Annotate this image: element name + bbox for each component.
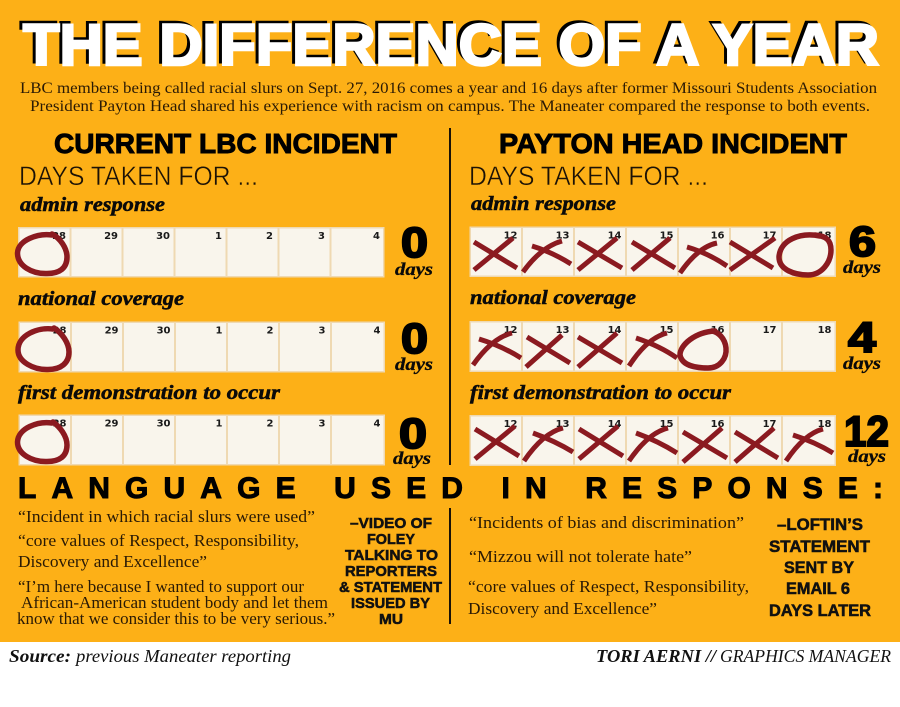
calendar: LBC admin response: 29: [104, 231, 118, 242]
calendar: Head national coverage: [470, 321, 836, 372]
quotes: LBC incident: Discovery and Excellence”: [18, 552, 207, 571]
intro text: President Payton Head shared his experience with racism on campus. The Maneater compared the response to both events.: [30, 98, 870, 115]
count: 0 days first demonstration: 0: [399, 410, 427, 458]
calendar: Head first demonstration: 14: [608, 419, 622, 430]
quotes: Payton Head incident: “core values of Respect, Responsibility,: [468, 577, 749, 596]
calendar: LBC national coverage: 3: [319, 326, 326, 336]
calendar: Head first demonstration: [470, 415, 836, 466]
intro text: [20, 80, 877, 115]
quotes: LBC incident: “core values of Respect, Responsibility,: [18, 531, 299, 550]
caption: Loftin's statement: STATEMENT: [769, 538, 870, 556]
count: 0 days admin response: [395, 219, 433, 279]
calendar: LBC national coverage: 28: [53, 326, 67, 336]
label: first demonstration left: first demonstration to occur: [18, 382, 280, 404]
count: 6 days admin response: 6: [849, 218, 876, 266]
calendar: LBC admin response: 4: [373, 231, 380, 242]
title: THE DIFFERENCE OF A YEAR: [23, 13, 879, 78]
count: 0 days national coverage: days: [395, 354, 433, 374]
label: national coverage left: national coverage: [18, 288, 184, 310]
calendar: LBC national coverage: 29: [105, 326, 119, 336]
heading: Payton Head incident: PAYTON HEAD INCIDENT: [499, 128, 847, 159]
calendar: LBC admin response: [18, 227, 384, 278]
calendar: LBC first demonstration: 3: [319, 418, 326, 430]
quotes: LBC incident: “I’m here because I wanted to support our: [18, 577, 304, 596]
caption: video of Foley: REPORTERS: [345, 563, 437, 580]
caption: video of Foley: [339, 515, 442, 628]
calendar: Head admin response: [470, 226, 836, 277]
count: 0 days national coverage: [395, 315, 433, 374]
count: 0 days first demonstration: days: [393, 448, 431, 468]
calendar: LBC admin response: 28: [52, 231, 66, 242]
quotes: LBC incident: know that we consider this to be very serious.”: [17, 609, 335, 628]
intro text: LBC members being called racial slurs on Sept. 27, 2016 comes a year and 16 days after former Missouri Students Association: [20, 80, 877, 97]
calendar: Head national coverage: 17: [763, 325, 777, 336]
caption: video of Foley: & STATEMENT: [339, 579, 442, 596]
label: admin response right: admin response: [471, 193, 616, 215]
section heading: language used in response: LANGUAGE USED IN RESPONSE:: [18, 472, 883, 505]
caption: Loftin's statement: –LOFTIN’S: [777, 516, 863, 534]
calendar: Head first demonstration: 12: [504, 419, 518, 430]
caption: video of Foley: TALKING TO: [345, 547, 438, 564]
heading: current LBC incident: CURRENT LBC INCIDENT: [54, 128, 397, 159]
calendar: LBC first demonstration: 4: [374, 418, 381, 430]
count: 4 days national coverage: days: [843, 353, 881, 373]
calendar: Head national coverage: 18: [818, 325, 832, 336]
caption: video of Foley: FOLEY: [367, 531, 415, 548]
title: THE DIFFERENCE OF A YEAR: [20, 10, 876, 76]
label: first demonstration right: first demonstration to occur: [470, 382, 731, 404]
quotes: LBC incident: [17, 507, 335, 628]
calendar: LBC admin response: 1: [215, 231, 222, 242]
source line: Source:: [9, 646, 71, 666]
count: 4 days national coverage: 4: [848, 314, 876, 362]
caption: video of Foley: –VIDEO OF: [350, 515, 432, 532]
calendar: Head admin response: 12: [504, 230, 518, 242]
credit line: [596, 646, 891, 666]
calendar: LBC national coverage: 1: [216, 326, 223, 336]
calendar: LBC first demonstration: 2: [267, 418, 274, 430]
count: 0 days national coverage: 0: [401, 315, 428, 363]
calendar: LBC national coverage: 2: [267, 326, 274, 336]
calendar: LBC first demonstration: 29: [105, 418, 119, 430]
calendar: Head first demonstration: 16: [711, 419, 725, 430]
quotes: Payton Head incident: “Incidents of bias and discrimination”: [469, 513, 744, 532]
calendar: LBC first demonstration: 28: [53, 418, 67, 430]
caption: Loftin's statement: DAYS LATER: [769, 602, 871, 620]
caption: video of Foley: ISSUED BY: [351, 595, 430, 612]
quotes: LBC incident: “Incident in which racial slurs were used”: [18, 507, 315, 526]
count: 4 days national coverage: [843, 314, 881, 373]
calendar: Head national coverage: 13: [556, 325, 570, 336]
calendar: Head admin response: 13: [556, 230, 570, 242]
caption: Loftin's statement: [769, 516, 871, 620]
calendar: Head admin response: 18: [818, 230, 832, 242]
calendar: Head admin response: 14: [608, 230, 622, 242]
quotes: Payton Head incident: [468, 513, 749, 618]
calendar: LBC first demonstration: 30: [157, 418, 171, 430]
count: 0 days admin response: 0: [401, 219, 428, 267]
calendar: LBC admin response: 3: [318, 231, 325, 242]
count: 12 days first demonstration: days: [848, 446, 886, 466]
source line: previous Maneater reporting: [74, 646, 291, 666]
calendar: LBC national coverage: 4: [374, 326, 381, 336]
count: 6 days admin response: days: [843, 257, 881, 277]
label: admin response left: admin response: [20, 194, 165, 216]
calendar: Head admin response: 16: [711, 230, 725, 242]
calendar: LBC national coverage: [18, 322, 385, 372]
calendar: Head admin response: 15: [660, 230, 674, 242]
calendar: Head first demonstration: 18: [818, 419, 832, 430]
calendar: LBC admin response: 30: [156, 231, 170, 242]
count: 0 days first demonstration: [393, 410, 431, 468]
calendar: Head national coverage: 14: [608, 325, 622, 336]
calendar: LBC national coverage: 30: [157, 326, 171, 336]
subheading right: DAYS TAKEN FOR ...: [469, 161, 708, 191]
calendar: Head first demonstration: 17: [763, 419, 777, 430]
count: 0 days admin response: days: [395, 259, 433, 279]
calendar: Head national coverage: 16: [711, 325, 725, 336]
calendar: LBC admin response: 2: [266, 231, 273, 242]
count: 6 days admin response: [843, 218, 881, 277]
center divider: [449, 128, 451, 624]
caption: Loftin's statement: EMAIL 6: [786, 580, 850, 598]
credit line: TORI AERNI //: [596, 646, 718, 666]
credit line: GRAPHICS MANAGER: [720, 646, 891, 666]
calendar: LBC first demonstration: [18, 414, 385, 466]
count: 12 days first demonstration: 12: [844, 408, 889, 456]
quotes: Payton Head incident: “Mizzou will not tolerate hate”: [469, 547, 692, 566]
subheading left: DAYS TAKEN FOR ...: [19, 161, 258, 191]
calendar: Head first demonstration: 13: [556, 419, 570, 430]
calendar: Head national coverage: 15: [660, 325, 674, 336]
calendar: Head first demonstration: 15: [660, 419, 674, 430]
caption: Loftin's statement: SENT BY: [784, 559, 854, 577]
label: national coverage right: national coverage: [470, 287, 636, 309]
calendar: Head national coverage: 12: [504, 325, 518, 336]
calendar: Head admin response: 17: [763, 230, 777, 242]
caption: video of Foley: MU: [379, 611, 403, 628]
quotes: LBC incident: African-American student body and let them: [21, 593, 328, 612]
quotes: Payton Head incident: Discovery and Excellence”: [468, 599, 657, 618]
calendar: LBC first demonstration: 1: [216, 418, 223, 430]
